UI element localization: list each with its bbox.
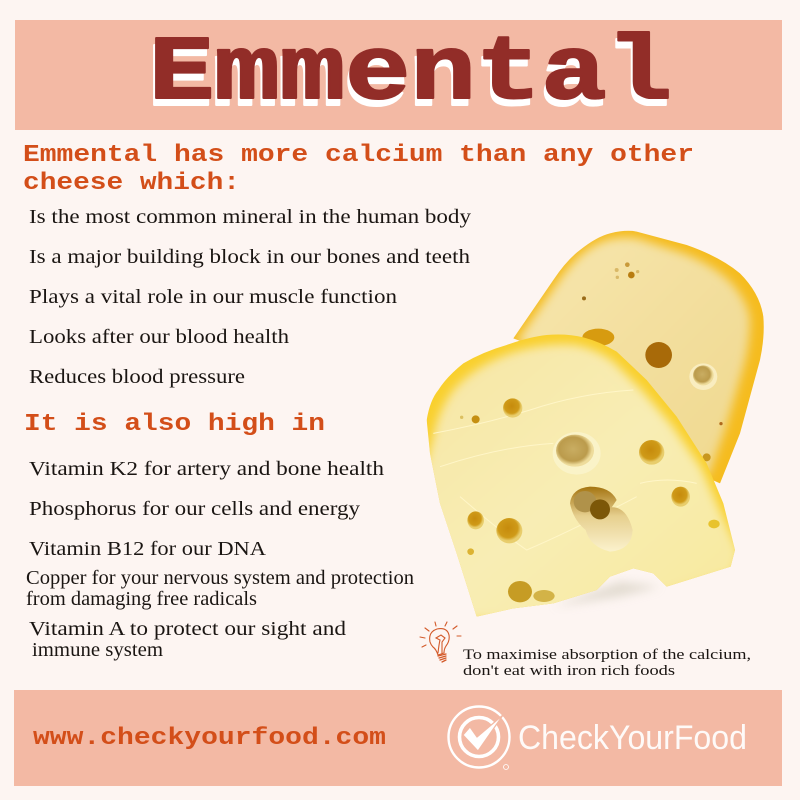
tip text: don't eat with iron rich foods — [463, 663, 675, 679]
tip text — [463, 647, 751, 679]
footer band — [14, 690, 782, 786]
nutrients list: Phosphorus for our cells and energy — [29, 498, 360, 520]
heading: calcium: cheese which: — [23, 170, 240, 197]
nutrients list — [26, 458, 414, 661]
website url: www.checkyourfood.com — [33, 725, 386, 752]
title: Emmental — [149, 23, 672, 126]
cheese illustration — [420, 220, 777, 620]
nutrients list: Vitamin B12 for our DNA — [29, 538, 267, 560]
heading: calcium: Emmental has more calcium than any other — [23, 142, 694, 169]
calcium benefits list: Reduces blood pressure — [29, 366, 245, 388]
nutrients list: immune system — [32, 639, 163, 661]
icon: check mark badge — [448, 706, 510, 770]
nutrients list: Vitamin A to protect our sight and — [29, 618, 346, 640]
front cheese slice — [420, 327, 743, 620]
cast shadow under cheese — [553, 582, 660, 607]
heading: also high in: It is also high in — [24, 411, 325, 438]
nutrients list: from damaging free radicals — [26, 588, 257, 610]
logo: CheckYourFood: CheckYourFood — [518, 719, 747, 757]
title banner — [15, 20, 782, 130]
calcium benefits list: Is a major building block in our bones and teeth — [29, 246, 470, 268]
calcium benefits list — [29, 206, 471, 388]
calcium benefits list: Looks after our blood health — [29, 326, 289, 348]
back cheese slice — [514, 230, 764, 484]
calcium benefits list: Plays a vital role in our muscle function — [29, 286, 397, 308]
central merged holes — [570, 487, 633, 552]
logo: CheckYourFood — [448, 706, 747, 770]
nutrients list: Vitamin K2 for artery and bone health — [29, 458, 384, 480]
heading: calcium — [23, 142, 694, 197]
tip text: To maximise absorption of the calcium, — [463, 647, 751, 663]
nutrients list: Copper for your nervous system and protection — [26, 567, 414, 589]
icon: lightbulb — [420, 622, 461, 662]
calcium benefits list: Is the most common mineral in the human body — [29, 206, 471, 228]
